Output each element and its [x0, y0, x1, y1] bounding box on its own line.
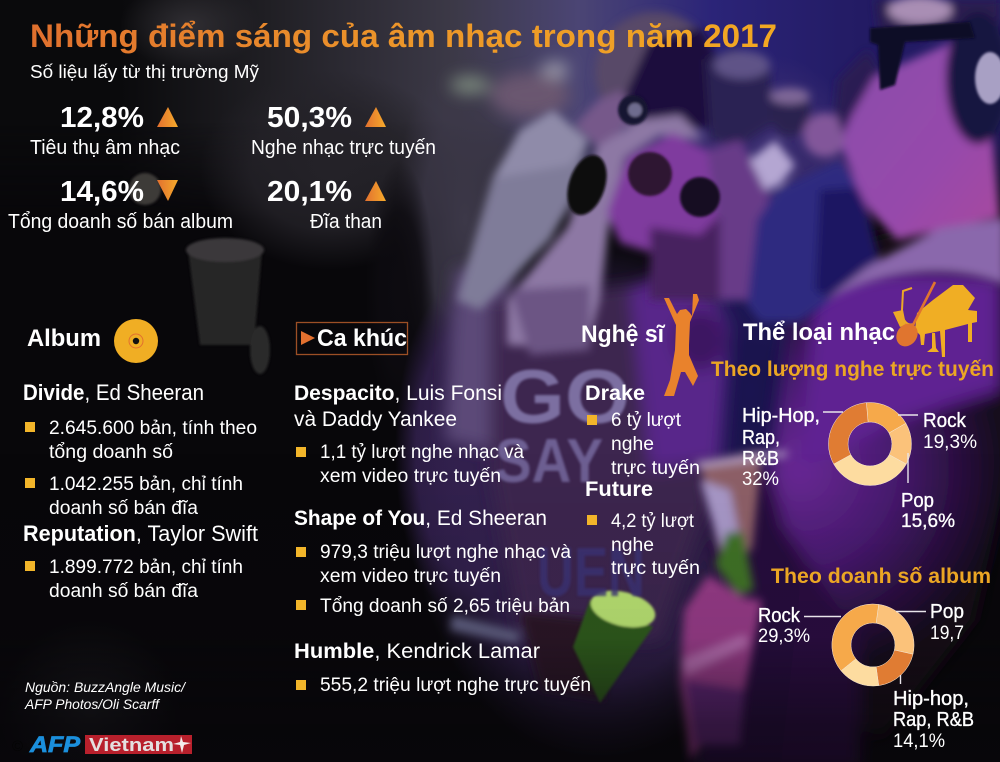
label: hip-hop streaming: R&B	[742, 448, 779, 470]
leader lines: streaming	[823, 412, 918, 483]
artist: Drake: nghe	[611, 434, 654, 455]
panel: songs	[294, 322, 591, 696]
artist: Future: Future	[585, 478, 653, 501]
logos: AFP and Vietnam+: AFP	[29, 732, 80, 757]
label: pop streaming: 15,6%	[901, 511, 955, 532]
label: hip-hop streaming: Hip-Hop,	[742, 405, 820, 427]
artist: Future: trực tuyến	[611, 558, 700, 579]
artist: Future: nghe	[611, 535, 654, 556]
donut chart: album sales share	[832, 604, 914, 686]
label: hip-hop album sales: 14,1%	[893, 731, 945, 752]
label: pop album sales: Pop	[930, 601, 964, 623]
green cup	[573, 600, 653, 703]
label: rock album sales: Rock	[758, 605, 801, 627]
album: Divide: tổng doanh số	[49, 442, 173, 463]
stat: album sales: 14,6%	[60, 176, 144, 208]
artist: Drake: trực tuyến	[611, 458, 700, 479]
stat: vinyl: Đĩa than	[310, 211, 382, 233]
logos: AFP and Vietnam+	[12, 732, 192, 757]
heading: songs: Ca khúc	[317, 325, 407, 352]
stat: music consumption	[30, 102, 180, 159]
artist: Future: 4,2 tỷ lượt	[611, 511, 695, 532]
song: Humble: Humble, Kendrick Lamar	[294, 640, 540, 663]
album: Divide: Divide, Ed Sheeran	[23, 380, 204, 405]
album: Divide: 1.042.255 bản, chỉ tính	[49, 474, 243, 495]
source note	[24, 679, 187, 712]
artist: Future	[585, 478, 700, 579]
album: Reputation: Reputation, Taylor Swift	[23, 521, 258, 546]
label: hip-hop streaming: Rap,	[742, 427, 780, 449]
label: pop album sales	[930, 601, 964, 644]
song: Shape of You: 979,3 triệu lượt nghe nhạc và	[320, 542, 571, 563]
subtitle: Số liệu lấy từ thị trường Mỹ	[30, 62, 259, 82]
album: Divide	[23, 380, 257, 519]
artist: Drake	[585, 382, 700, 479]
heading: artists: Nghệ sĩ	[581, 321, 665, 348]
stat: music consumption: Tiêu thụ âm nhạc	[30, 137, 180, 159]
man face	[843, 43, 1000, 240]
donut chart: streaming share	[828, 402, 911, 485]
stat: vinyl	[267, 176, 386, 233]
panel: artists	[581, 294, 700, 579]
song: Despacito: Despacito, Luis Fonsi	[294, 382, 502, 405]
label: pop album sales: 19,7	[930, 623, 964, 644]
woman	[507, 115, 705, 350]
shirt lettering	[495, 355, 645, 611]
logos: AFP and Vietnam+: Vietnam	[89, 735, 174, 755]
song: Despacito: 1,1 tỷ lượt nghe nhạc và	[320, 442, 524, 463]
stat: music consumption: 12,8%	[60, 102, 144, 134]
song: Shape of You	[294, 507, 571, 617]
song: Despacito	[294, 382, 524, 487]
song: Shape of You: xem video trực tuyến	[320, 566, 501, 587]
album: Reputation: doanh số bán đĩa	[49, 581, 198, 602]
label: pop streaming	[901, 490, 955, 532]
people right	[705, 48, 772, 145]
logos: AFP and Vietnam+: ©	[12, 738, 23, 755]
song: Despacito: xem video trực tuyến	[320, 466, 501, 487]
label: hip-hop streaming	[742, 405, 820, 490]
heading: songs	[296, 322, 408, 354]
icon: dancing person	[664, 294, 699, 396]
artist: Drake: Drake	[585, 382, 645, 405]
label: hip-hop album sales	[893, 688, 974, 752]
album: Reputation	[23, 521, 258, 602]
song: Shape of You: Tổng doanh số 2,65 triệu bản	[320, 596, 570, 617]
panel: genres	[711, 282, 994, 752]
crowd cup	[188, 250, 262, 345]
heading: genres: Thể loại nhạc	[743, 319, 895, 346]
source note: AFP Photos/Oli Scarff	[24, 696, 161, 712]
stat: online streaming: 50,3%	[267, 102, 352, 134]
panel: key statistics	[8, 102, 436, 233]
subheading: streaming: Theo lượng nghe trực tuyến	[711, 357, 994, 381]
subheading: album sales: Theo doanh số album	[771, 564, 991, 588]
stat: online streaming: Nghe nhạc trực tuyến	[251, 137, 436, 159]
song: Despacito: và Daddy Yankee	[294, 408, 457, 431]
title: Những điểm sáng của âm nhạc trong năm 2017	[30, 18, 777, 54]
icon: disc	[114, 319, 158, 363]
shirt lettering: GO	[500, 355, 630, 440]
label: rock streaming: Rock	[923, 410, 967, 432]
panel: album	[23, 319, 258, 602]
album: Reputation: 1.899.772 bản, chỉ tính	[49, 557, 243, 578]
label: rock album sales: 29,3%	[758, 626, 810, 647]
stat: vinyl: 20,1%	[267, 176, 352, 208]
album: Divide: doanh số bán đĩa	[49, 498, 198, 519]
label: hip-hop album sales: Hip-hop,	[893, 688, 969, 710]
head behind	[595, 12, 715, 132]
label: hip-hop album sales: Rap, R&B	[893, 709, 974, 731]
hoodie	[457, 110, 588, 310]
icon: instruments	[892, 282, 977, 357]
heading: album: Album	[27, 325, 101, 352]
leader lines: album sales	[804, 612, 926, 684]
song: Shape of You: Shape of You, Ed Sheeran	[294, 507, 547, 530]
label: rock streaming: 19,3%	[923, 432, 977, 453]
label: rock album sales	[758, 605, 810, 647]
right cup and hand	[700, 450, 762, 558]
label: hip-hop streaming: 32%	[742, 469, 779, 490]
shirt lettering: UEN	[537, 533, 645, 611]
song: Humble: 555,2 triệu lượt nghe trực tuyến	[320, 675, 591, 696]
stat: online streaming	[251, 102, 436, 159]
label: rock streaming	[923, 410, 977, 453]
stat: album sales: Tổng doanh số bán album	[8, 211, 233, 233]
label: pop streaming: Pop	[901, 490, 934, 512]
blue tee	[747, 160, 880, 322]
wristband and hand	[520, 612, 605, 700]
shirt lettering: SAY	[495, 427, 603, 496]
artist: Drake: 6 tỷ lượt	[611, 410, 682, 431]
song: Humble	[294, 640, 591, 696]
album: Divide: 2.645.600 bản, tính theo	[49, 418, 257, 439]
stat: album sales	[8, 176, 233, 233]
source note: Nguồn: BuzzAngle Music/	[25, 679, 187, 695]
